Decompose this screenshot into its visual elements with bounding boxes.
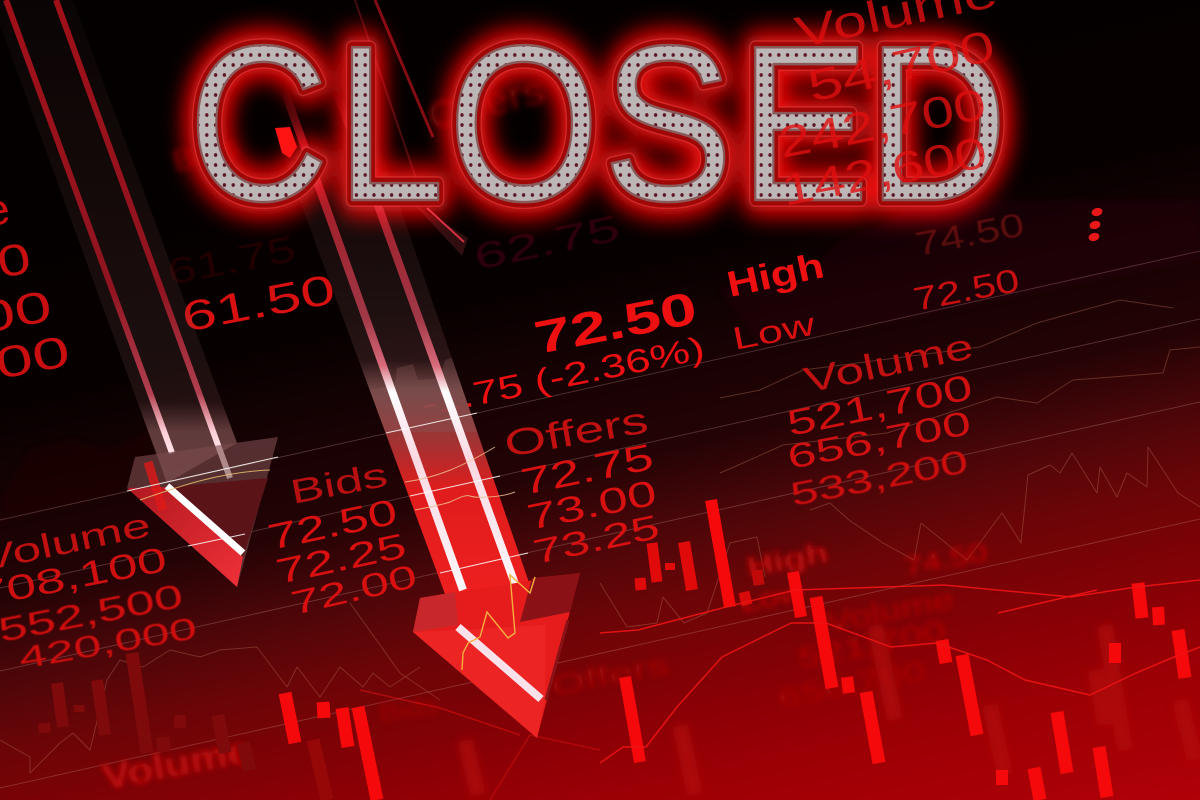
price table: lower volume: 656,700 — [784, 404, 974, 477]
faint background price text: 74.50 — [912, 206, 1027, 263]
red shard inside letter C — [275, 127, 297, 158]
blurred reflected text in lower chart: 521,700 — [795, 615, 948, 674]
faint background price text: Offers — [424, 69, 549, 139]
price table: lower volume — [783, 325, 977, 513]
price table: offers — [501, 399, 663, 572]
price table: lower volume: 533,200 — [787, 443, 971, 513]
small arrow head stripe — [167, 486, 243, 553]
blurred reflected text in lower chart: High — [744, 537, 831, 583]
skyline pattern inside shaft — [370, 358, 477, 432]
blurred reflected text in lower chart: Low — [737, 576, 806, 618]
status dots icon — [1088, 207, 1103, 242]
price table: bids: 72.25 — [273, 526, 410, 592]
distant arrow behind sign — [355, 0, 468, 256]
price table: offers: 73.25 — [530, 508, 663, 572]
large arrow shaft — [270, 120, 535, 613]
blurred reflected text in lower chart: Volume — [823, 583, 957, 638]
blurred reflected text in lower chart: 74.50 — [901, 536, 990, 582]
price table: left column — [0, 184, 339, 396]
blurred candles background — [465, 625, 1195, 795]
highlight lines across arrow — [386, 413, 528, 573]
small arrow shaft — [0, 0, 237, 483]
blurred reflected text in lower chart: Volume — [99, 729, 254, 798]
large arrow head — [413, 573, 580, 738]
faint background price text: 61.75 — [164, 228, 299, 293]
price table: bids: Bids — [287, 456, 391, 512]
faint background price text: 62.75 — [470, 207, 623, 278]
price readout: high and low: 72.50 — [910, 261, 1022, 318]
sign red glow: CLOSED — [188, 0, 1008, 248]
price readout: high and low: High — [723, 244, 828, 305]
price readout: high and low: 72.50 — [530, 281, 701, 364]
price table: bids — [264, 456, 420, 622]
small down arrow — [0, 0, 278, 587]
sign halo outline: CLOSED — [188, 0, 1008, 248]
blurred reflected text in lower chart: Bids — [377, 690, 440, 728]
closed sign — [188, 0, 1008, 248]
large arrow shaft stripes — [285, 92, 528, 620]
price readout: high and low: Low — [729, 305, 819, 357]
yellow sparkline on arrow — [462, 575, 535, 670]
trend lines — [360, 580, 1200, 800]
faint background price text: Bids — [169, 130, 243, 179]
price table: offers: 72.75 — [517, 436, 657, 503]
price readout: high and low — [418, 244, 1022, 423]
blurred reflected text in lower chart: Offers — [548, 649, 672, 702]
blurred reflected text in lower chart — [99, 536, 990, 798]
price table: upper volume: 242,700 — [775, 80, 990, 168]
small arrow shaft stripes — [6, 0, 230, 478]
large arrow head stripe — [458, 627, 541, 699]
price table: offers: Offers — [501, 399, 651, 465]
candlestick chart: right — [625, 500, 1185, 800]
sign halo inner: CLOSED — [188, 0, 1008, 248]
price table: upper volume: 54,700 — [803, 21, 999, 112]
sign lettering: CLOSED — [188, 0, 1008, 248]
price table: upper volume: 142,600 — [778, 128, 991, 216]
price table: bids: 72.00 — [287, 557, 420, 622]
price table: lower volume: 521,700 — [783, 366, 976, 444]
price table: bids: 72.50 — [264, 490, 401, 558]
price table: lower volume: Volume — [800, 325, 977, 401]
blurred reflected text in lower chart: 656,700 — [775, 655, 928, 714]
sign red glow: CLOSED — [188, 0, 1008, 248]
price table: bottom-left volume — [0, 506, 199, 676]
sparkline charts — [0, 300, 1200, 773]
large down arrow — [270, 92, 580, 738]
price table: upper volume — [775, 0, 1002, 216]
small arrow head — [127, 437, 278, 587]
price readout: high and low: -1.75 (-2.36%) — [418, 329, 708, 423]
price table: bottom-left volume: 420,000 — [16, 610, 199, 676]
price table: left column: 61.50 — [178, 265, 339, 341]
price table: offers: 73.00 — [523, 472, 660, 538]
faint background price text — [164, 69, 1027, 293]
candlestick chart: left — [44, 653, 377, 800]
